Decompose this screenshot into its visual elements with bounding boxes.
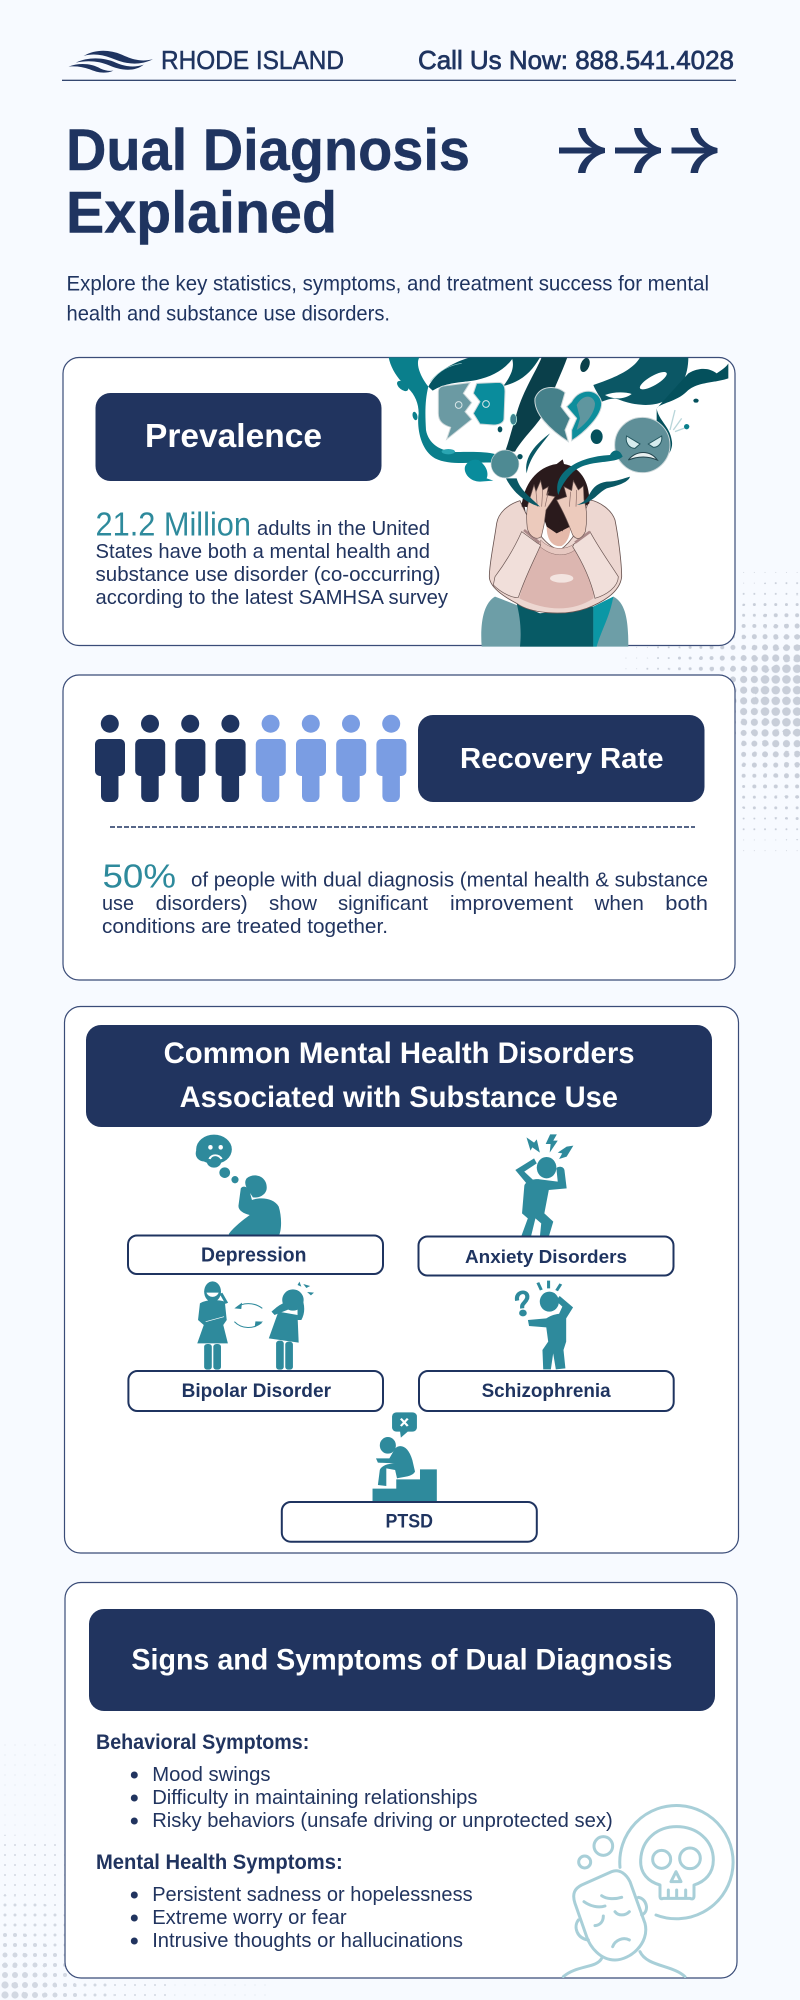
- list: mental health symptoms: [96, 1851, 473, 1952]
- brand name: RHODE ISLAND: [161, 45, 344, 75]
- phone number: Call Us Now: 888.541.4028: [418, 45, 734, 75]
- icon: sad head with skull thought: [563, 1805, 733, 1977]
- list: behavioral symptoms: Mood swings: [152, 1763, 270, 1786]
- recovery text: when: [593, 892, 644, 915]
- recovery text: improvement: [450, 892, 573, 915]
- title: [66, 118, 470, 246]
- prevalence text: 21.2 Million: [96, 506, 251, 543]
- title: Explained: [66, 181, 337, 246]
- label: bipolar disorder: [128, 1371, 383, 1411]
- label: ptsd: PTSD: [386, 1512, 433, 1533]
- list: mental health symptoms: Intrusive thoughts or hallucinations: [152, 1929, 463, 1952]
- label: depression: Depression: [201, 1245, 306, 1267]
- heading: prevalence: [96, 393, 382, 481]
- label: anxiety disorders: Anxiety Disorders: [465, 1246, 627, 1267]
- recovery text: both: [665, 892, 708, 915]
- list: behavioral symptoms: Risky behaviors (unsafe driving or unprotected sex): [152, 1809, 613, 1832]
- heading: common mental health disorders: Associated with Substance Use: [180, 1081, 618, 1114]
- panel: signs and symptoms: [65, 1582, 737, 1978]
- label: schizophrenia: Schizophrenia: [482, 1381, 611, 1402]
- subtitle: Explore the key statistics, symptoms, and treatment success for mental: [66, 272, 709, 296]
- illustration: distressed man with swirling thoughts: [389, 357, 728, 647]
- icon: three arrows: [559, 128, 718, 173]
- subtitle: health and substance use disorders.: [66, 302, 390, 326]
- panel: recovery rate: [63, 675, 735, 980]
- label: anxiety disorders: [418, 1236, 674, 1276]
- panel: prevalence: [63, 357, 735, 647]
- list: mental health symptoms: Persistent sadness or hopelessness: [152, 1883, 473, 1906]
- label: schizophrenia: [419, 1371, 674, 1411]
- recovery text: conditions are treated together.: [102, 915, 388, 938]
- recovery text: disorders): [156, 892, 248, 915]
- prevalence text: according to the latest SAMHSA survey: [96, 586, 449, 609]
- header bar: [62, 45, 736, 81]
- recovery text: of people with dual diagnosis (mental health & substance: [191, 869, 708, 892]
- prevalence text: States have both a mental health and: [96, 540, 430, 563]
- list: mental health symptoms: Extreme worry or fear: [152, 1906, 347, 1929]
- icon: depression: [196, 1135, 281, 1238]
- icon: wave logo: [68, 51, 153, 73]
- prevalence text: substance use disorder (co-occurring): [96, 563, 440, 586]
- panel: common mental health disorders: [64, 1006, 738, 1553]
- list: behavioral symptoms: Behavioral Symptoms:: [96, 1731, 309, 1754]
- list: mental health symptoms: Mental Health Symptoms:: [96, 1851, 343, 1874]
- recovery text: 50%: [102, 858, 176, 895]
- subtitle: [66, 272, 709, 326]
- heading: common mental health disorders: [86, 1025, 712, 1127]
- prevalence text: adults in the United: [257, 517, 430, 540]
- recovery text: significant: [338, 892, 428, 915]
- pictogram: eight people, four highlighted: [95, 715, 406, 802]
- recovery text: [102, 858, 708, 938]
- heading: recovery rate: [418, 715, 704, 802]
- heading: common mental health disorders: Common Mental Health Disorders: [164, 1037, 635, 1070]
- list: behavioral symptoms: [96, 1731, 613, 1832]
- recovery text: use: [102, 892, 134, 915]
- recovery text: show: [269, 892, 317, 915]
- label: ptsd: [282, 1502, 537, 1542]
- title: Dual Diagnosis: [66, 118, 470, 183]
- heading: recovery rate: Recovery Rate: [460, 743, 664, 775]
- icon: ptsd: [373, 1412, 437, 1503]
- heading: signs and symptoms: Signs and Symptoms of Dual Diagnosis: [131, 1643, 672, 1676]
- prevalence text: [96, 506, 449, 609]
- label: bipolar disorder: Bipolar Disorder: [182, 1381, 332, 1402]
- icon: schizophrenia: [517, 1281, 573, 1369]
- icon: anxiety: [515, 1134, 573, 1237]
- heading: prevalence: Prevalence: [145, 417, 322, 454]
- label: depression: [128, 1236, 383, 1274]
- heading: signs and symptoms: [89, 1609, 715, 1711]
- list: behavioral symptoms: Difficulty in maintaining relationships: [152, 1786, 477, 1809]
- icon: bipolar disorder: [197, 1281, 314, 1370]
